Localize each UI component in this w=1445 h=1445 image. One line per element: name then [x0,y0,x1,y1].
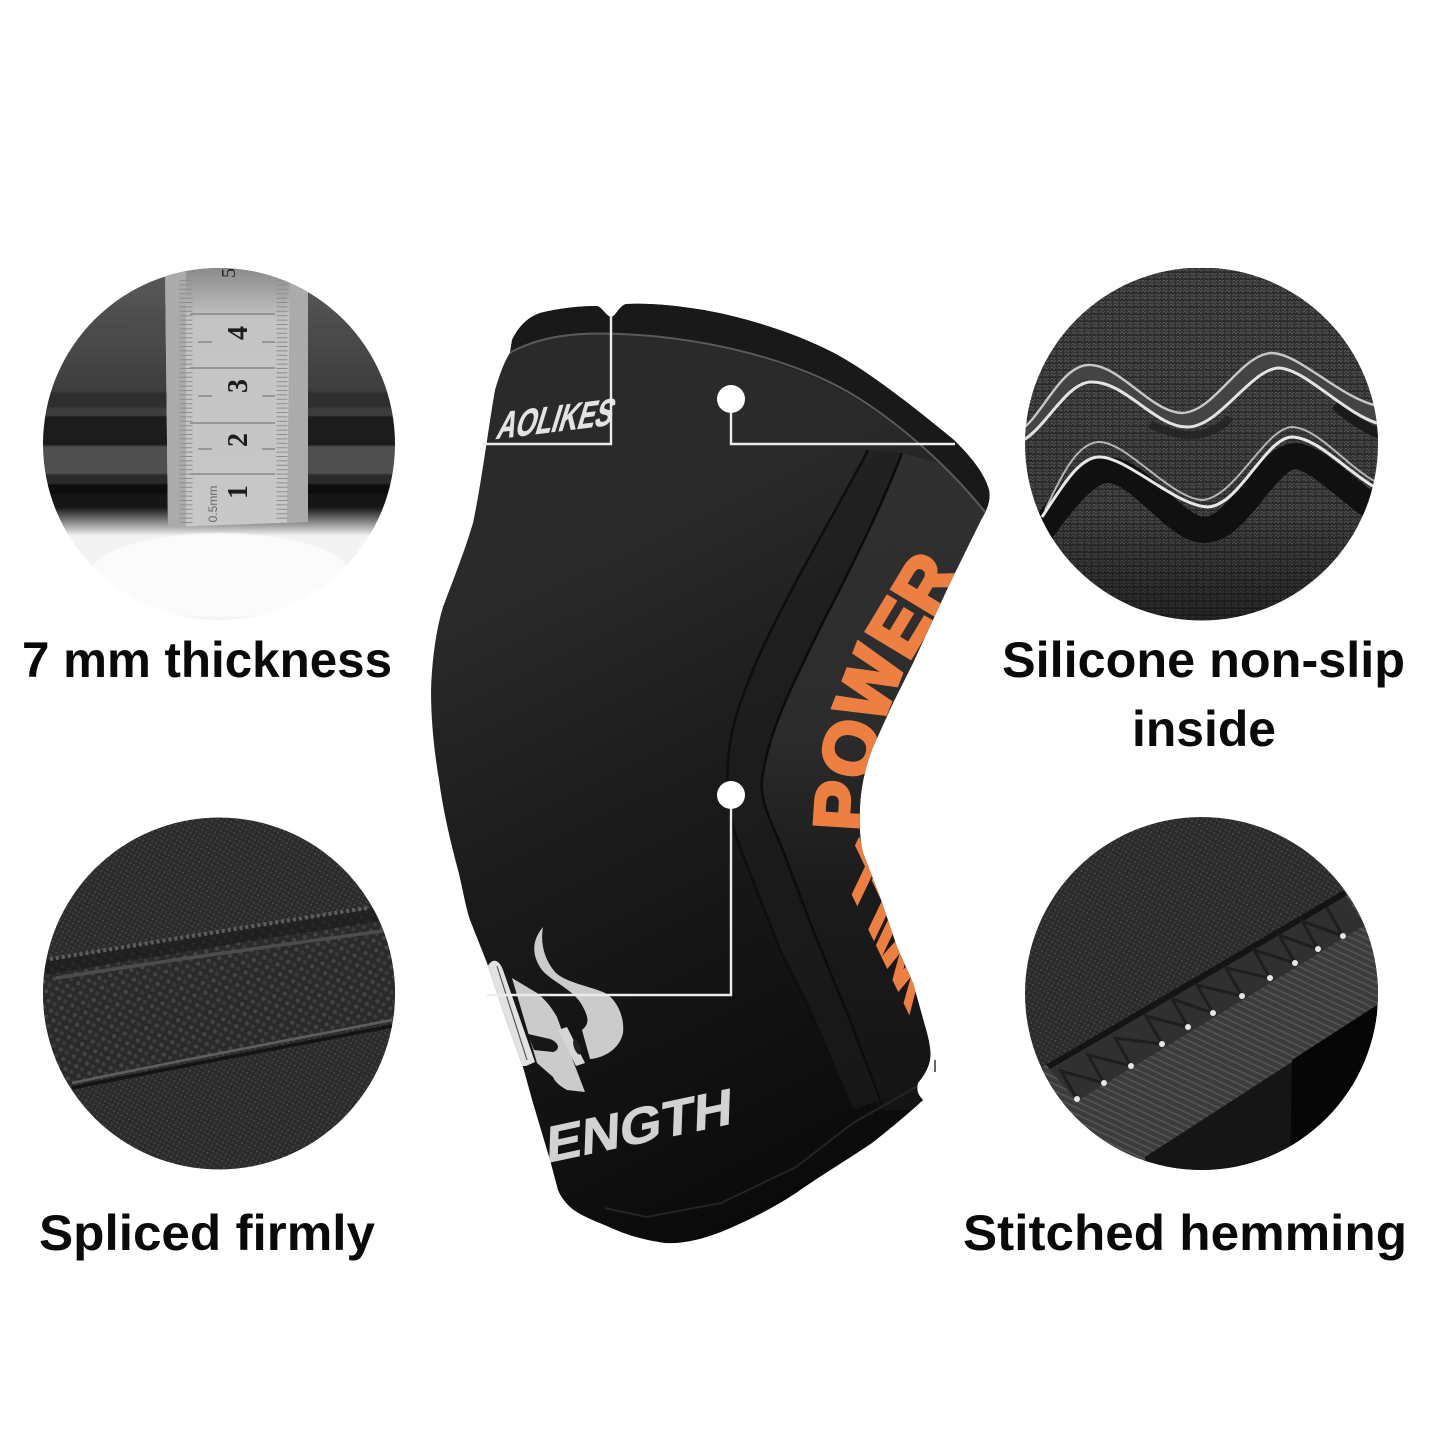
ruler: 1 [223,485,254,499]
bottom hem [605,1086,918,1217]
text: ENGTH: ENGTH [546,1077,733,1174]
ruler: 4 [223,326,254,340]
label: silicone non-slip inside: inside [1132,701,1276,757]
ruler: 3 [223,379,254,393]
top collar hem [500,300,1000,520]
knee seam band [824,1022,877,1110]
text: POWER: POWER [812,554,955,828]
label: silicone non-slip inside [1002,632,1405,757]
label: silicone non-slip inside: Silicone non-slip [1002,632,1405,688]
panel: stitched hemming photo [1025,817,1400,1170]
knee sleeve product [431,304,990,1244]
text: AOLIKES brand: AOLIKES [492,391,621,448]
label: spliced firmly: Spliced firmly [39,1205,375,1261]
panel: silicone non-slip photo [1020,268,1385,621]
panel right of the knee seam [762,453,1000,1110]
callout line: collar to brand [482,316,611,444]
label: stitched hemming: Stitched hemming [963,1205,1407,1261]
logo: bull helmet [480,927,623,1092]
ruler: 0.5mm [206,486,220,522]
callout: lower dot and line [487,781,745,995]
panel: spliced firmly photo [40,817,400,1170]
callout: upper right dot and line [717,385,955,444]
small edge fleck [934,1060,936,1072]
ruler [165,268,308,527]
ruler: 5 [218,268,240,278]
label: 7 mm thickness: 7 mm thickness [22,632,392,688]
panel: 7 mm thickness photo [40,265,398,623]
text: WILL: WILL [838,828,930,1021]
ruler: 2 [223,433,254,447]
